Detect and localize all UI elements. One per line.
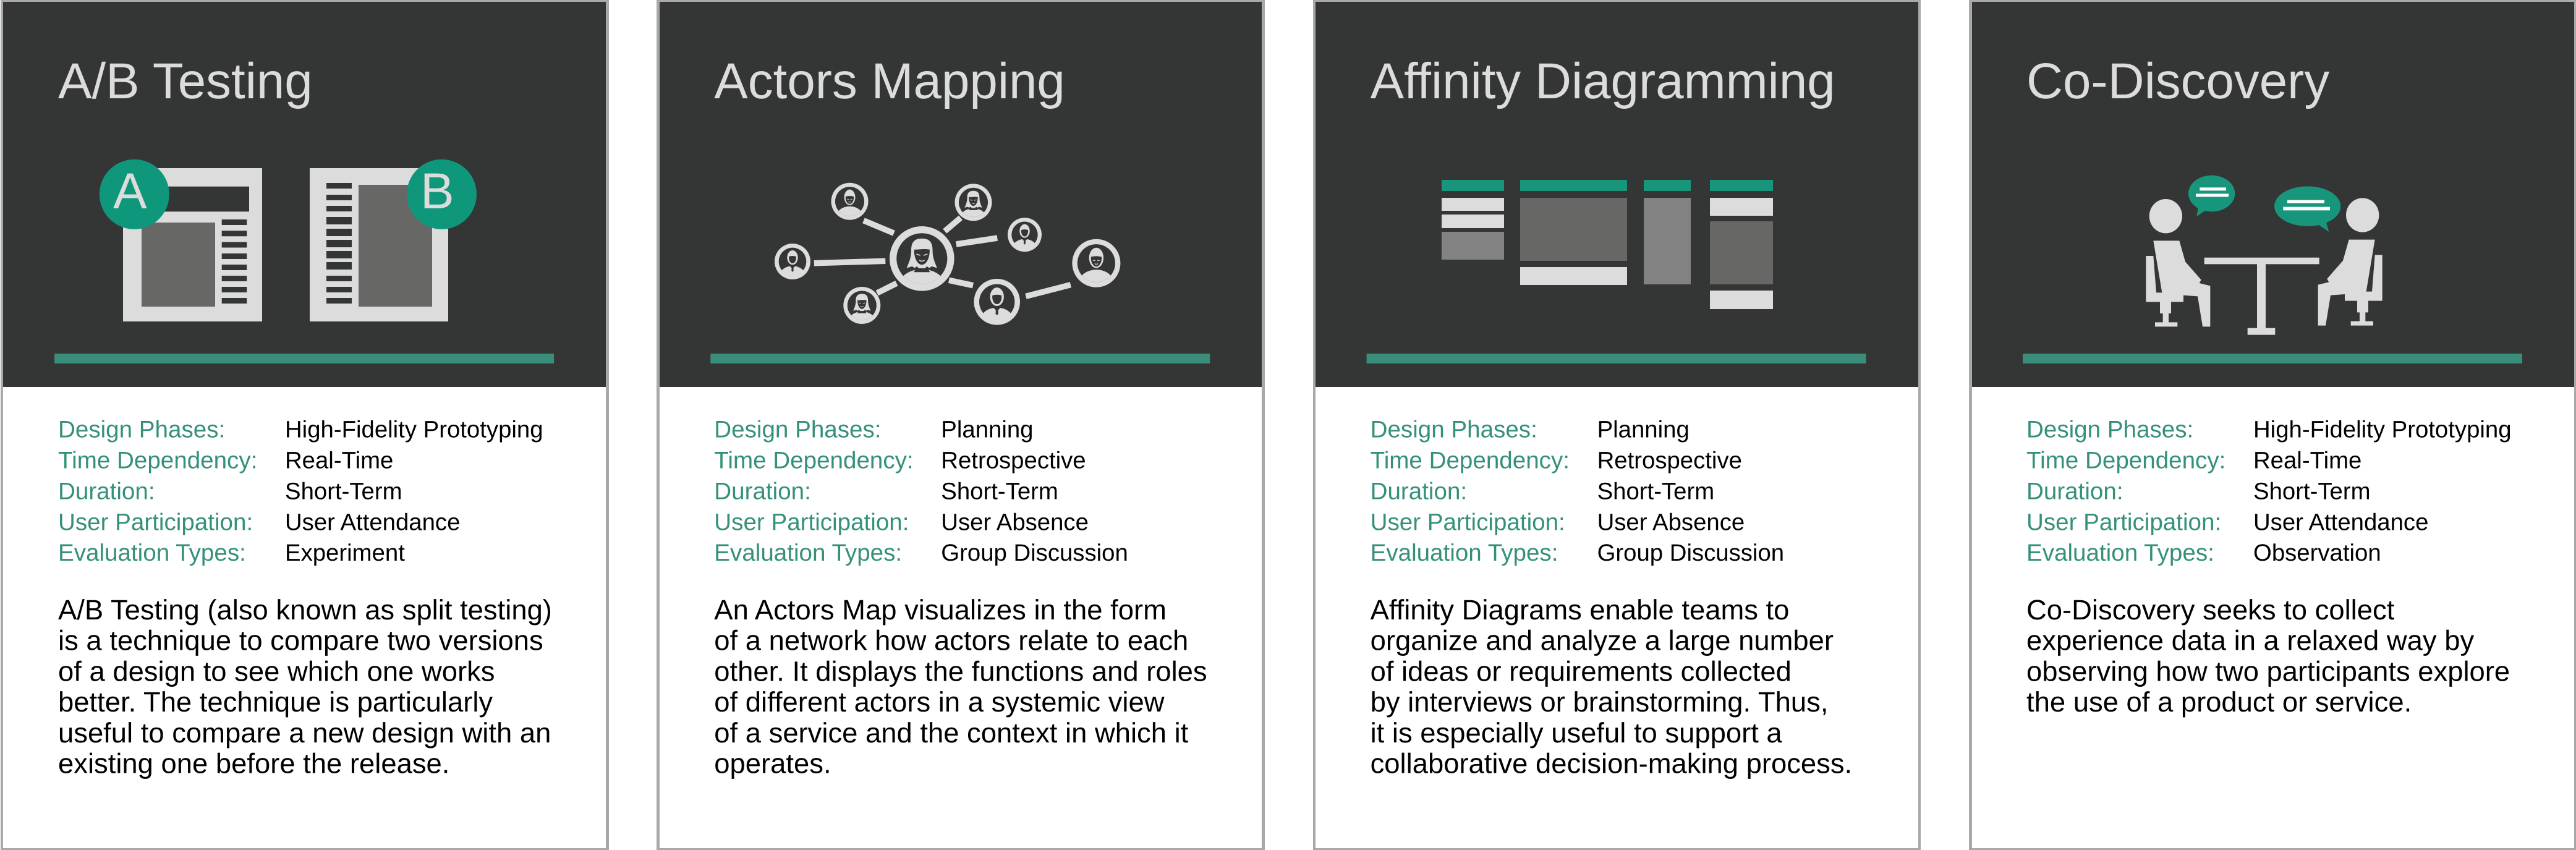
title: A/B Testing: A/B Testing — [58, 53, 313, 109]
attribute table: User Participation: — [58, 509, 253, 535]
attribute table: Retrospective — [1597, 448, 1742, 474]
attribute table: User Attendance — [285, 509, 460, 535]
attribute table: Real-Time — [2253, 448, 2361, 474]
attribute table: Evaluation Types: — [58, 540, 246, 566]
description — [714, 594, 1207, 779]
attribute table: User Participation: — [2026, 509, 2221, 535]
attribute table: Design Phases: — [2026, 417, 2193, 443]
attribute table: Experiment — [285, 540, 405, 566]
attribute table: User Absence — [1597, 509, 1745, 535]
attribute table — [714, 417, 1128, 566]
attribute table — [58, 417, 543, 566]
description: existing one before the release. — [58, 748, 449, 779]
divider bar — [54, 354, 554, 363]
description: collaborative decision-making process. — [1371, 748, 1852, 779]
attribute table: Duration: — [58, 478, 155, 504]
attribute table: Time Dependency: — [58, 448, 257, 474]
description: observing how two participants explore — [2026, 655, 2510, 687]
attribute table: User Participation: — [714, 509, 909, 535]
attribute table: User Attendance — [2253, 509, 2428, 535]
description: it is especially useful to support a — [1371, 717, 1782, 749]
attribute table: Evaluation Types: — [2026, 540, 2214, 566]
attribute table: High-Fidelity Prototyping — [2253, 417, 2512, 443]
icon: A/B page variants: B — [420, 163, 454, 219]
icon: two people talking at a table — [2146, 176, 2383, 335]
attribute table: Time Dependency: — [2026, 448, 2225, 474]
description: is a technique to compare two versions — [58, 625, 543, 657]
attribute table: Short-Term — [2253, 478, 2371, 504]
description: by interviews or brainstorming. Thus, — [1371, 686, 1828, 718]
attribute table: Planning — [941, 417, 1033, 443]
icon: A/B page variants — [100, 159, 477, 321]
attribute table: Observation — [2253, 540, 2381, 566]
description — [1371, 594, 1852, 779]
attribute table — [1371, 417, 1784, 566]
panel: Actors Mapping — [657, 0, 1265, 850]
attribute table: User Absence — [941, 509, 1089, 535]
panel: Affinity Diagramming — [1313, 0, 1921, 850]
description: operates. — [714, 748, 831, 779]
description: of a network how actors relate to each — [714, 625, 1188, 657]
attribute table: Group Discussion — [941, 540, 1128, 566]
attribute table: Time Dependency: — [714, 448, 914, 474]
panel: A/B Testing — [1, 0, 609, 850]
attribute table: Retrospective — [941, 448, 1086, 474]
divider bar — [710, 354, 1210, 363]
description: of ideas or requirements collected — [1371, 655, 1792, 687]
description: experience data in a relaxed way by — [2026, 625, 2474, 657]
icon: A/B page variants: A — [113, 163, 147, 219]
attribute table: User Participation: — [1371, 509, 1565, 535]
attribute table: Duration: — [2026, 478, 2123, 504]
description: of a design to see which one works — [58, 655, 495, 687]
attribute table: Group Discussion — [1597, 540, 1784, 566]
attribute table: Duration: — [1371, 478, 1467, 504]
attribute table — [2026, 417, 2512, 566]
attribute table: High-Fidelity Prototyping — [285, 417, 543, 443]
attribute table: Real-Time — [285, 448, 393, 474]
divider bar — [1367, 354, 1866, 363]
attribute table: Planning — [1597, 417, 1690, 443]
attribute table: Short-Term — [1597, 478, 1714, 504]
icon: actor network — [775, 183, 1120, 333]
description: An Actors Map visualizes in the form — [714, 594, 1167, 626]
description: organize and analyze a large number — [1371, 625, 1834, 657]
divider bar — [2023, 354, 2522, 363]
description — [2026, 594, 2510, 718]
title: Affinity Diagramming: Affinity Diagramming — [1371, 53, 1835, 109]
attribute table: Duration: — [714, 478, 811, 504]
attribute table: Short-Term — [285, 478, 402, 504]
panel: Co-Discovery — [1969, 0, 2576, 850]
title: Actors Mapping: Actors Mapping — [714, 53, 1065, 109]
icon: affinity diagram columns — [1442, 180, 1773, 309]
description: better. The technique is particularly — [58, 686, 493, 718]
attribute table: Time Dependency: — [1371, 448, 1570, 474]
attribute table: Design Phases: — [714, 417, 882, 443]
attribute table: Design Phases: — [1371, 417, 1537, 443]
description: useful to compare a new design with an — [58, 717, 551, 749]
description: of a service and the context in which it — [714, 717, 1189, 749]
description — [58, 594, 552, 779]
attribute table: Evaluation Types: — [1371, 540, 1558, 566]
description: of different actors in a systemic view — [714, 686, 1165, 718]
attribute table: Evaluation Types: — [714, 540, 902, 566]
description: Affinity Diagrams enable teams to — [1371, 594, 1789, 626]
title: Co-Discovery: Co-Discovery — [2026, 53, 2329, 109]
description: Co-Discovery seeks to collect — [2026, 594, 2395, 626]
attribute table: Design Phases: — [58, 417, 225, 443]
description: other. It displays the functions and roles — [714, 655, 1207, 687]
attribute table: Short-Term — [941, 478, 1058, 504]
description: the use of a product or service. — [2026, 686, 2412, 718]
description: A/B Testing (also known as split testing) — [58, 594, 552, 626]
